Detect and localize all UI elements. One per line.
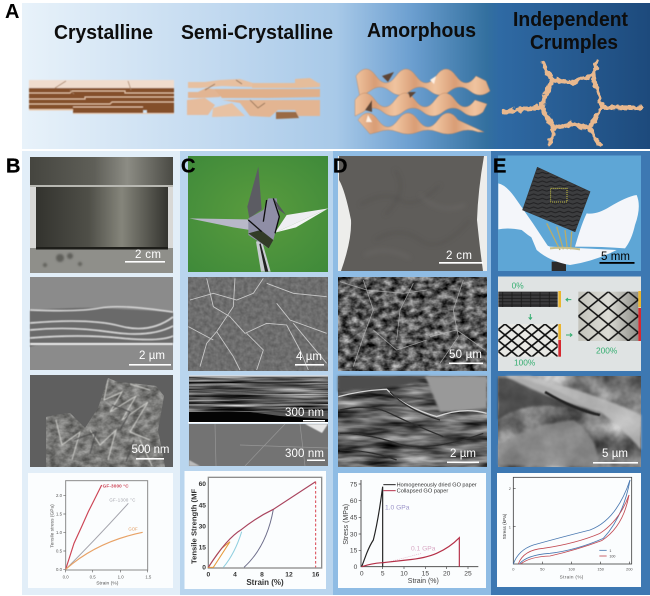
heading: Independent Crumples: Independent bbox=[513, 9, 628, 31]
chart: stress vs strain, GO paper: 75 bbox=[350, 481, 358, 488]
lattice at 0% strain: 0% bbox=[512, 281, 524, 291]
panel label A: A bbox=[5, 1, 19, 23]
chart: stress vs strain, GO paper: Strain (%) bbox=[408, 578, 439, 585]
panel backgrounds bbox=[22, 151, 650, 595]
photo: lattice on flower bbox=[498, 156, 641, 272]
scale bar: 5 mm: 5 mm bbox=[601, 251, 630, 263]
chart: tensile stress vs strain, GF films: GF-3000 °C bbox=[103, 483, 129, 488]
scale bar: 2 cm bbox=[125, 249, 165, 263]
scale bar: 300 nm lower: 300 nm bbox=[285, 448, 324, 460]
panel A: structure types bbox=[5, 1, 650, 149]
scale bar: 2 µm bbox=[447, 448, 479, 463]
scale bar: 2 cm: 2 cm bbox=[446, 250, 472, 262]
scale bar: 4 µm: 4 µm bbox=[296, 351, 322, 363]
scale bar: 300 nm: 300 nm bbox=[285, 407, 324, 419]
chart: tensile strength vs strain: 4 bbox=[233, 571, 237, 578]
chart: stress vs strain, GO paper: 25 bbox=[464, 570, 472, 577]
SEM: lattice wall bbox=[498, 376, 641, 467]
chart: tensile strength vs strain: 0 bbox=[202, 564, 206, 571]
chart: tensile stress vs strain, GF films: 1.0 bbox=[118, 574, 124, 579]
panel label B: B bbox=[6, 156, 20, 178]
illustration: crystalline stacked layers bbox=[29, 80, 174, 114]
chart: tensile strength vs strain bbox=[184, 471, 326, 589]
chart: stress vs strain, GO paper: 30 bbox=[350, 531, 358, 538]
scale bar: 500 nm: 500 nm bbox=[132, 444, 170, 456]
chart: tensile stress vs strain, GF films: 1.5 bbox=[56, 512, 63, 517]
photo: collapsed GO paper bbox=[338, 156, 487, 271]
arrows between states bbox=[529, 298, 572, 337]
chart: stress vs strain, cyclic loading: Stress (kPa) bbox=[502, 513, 507, 539]
heading: Amorphous: Amorphous bbox=[367, 20, 476, 42]
chart: stress vs strain, GO paper: 45 bbox=[350, 515, 358, 522]
photo: graphite cylinder bbox=[30, 157, 173, 273]
SEM: film cross section, smooth bbox=[189, 424, 328, 466]
illustration: amorphous wavy layers bbox=[355, 69, 490, 134]
chart: tensile stress vs strain, GF films: 0.5 bbox=[56, 549, 63, 554]
lattice at 100% strain: 100% bbox=[514, 357, 536, 367]
chart: stress vs strain, GO paper: 0.1 GPa bbox=[411, 546, 436, 553]
chart: tensile stress vs strain, GF films: 0.0 bbox=[56, 567, 63, 572]
chart: stress vs strain, GO paper bbox=[338, 473, 486, 588]
chart: stress vs strain, cyclic loading: Strain (%) bbox=[560, 575, 584, 580]
heading: Semi-Crystalline: Semi-Crystalline bbox=[181, 22, 333, 44]
chart: tensile stress vs strain, GF films: GF-1300 °C bbox=[109, 497, 135, 502]
chart: stress vs strain, cyclic loading: 100 bbox=[568, 566, 576, 571]
chart: stress vs strain, GO paper: 15 bbox=[350, 548, 358, 555]
chart: stress vs strain, GO paper: 60 bbox=[350, 498, 358, 505]
panel label E: E bbox=[493, 156, 506, 178]
chart: stress vs strain, GO paper: 0 bbox=[354, 564, 358, 571]
scale bar: 2 µm: 2 µm bbox=[450, 448, 476, 460]
illustration: independent crumples hexagon bbox=[504, 63, 641, 145]
chart: tensile stress vs strain, GF films: GOF bbox=[128, 527, 138, 532]
chart: stress vs strain, cyclic loading: 50 bbox=[540, 566, 545, 571]
chart: tensile strength vs strain: 12 bbox=[285, 571, 293, 578]
chart: stress vs strain, GO paper: 0 bbox=[360, 570, 364, 577]
chart: tensile strength vs strain: 30 bbox=[199, 523, 206, 530]
illustration: semi-crystalline broken layers bbox=[187, 78, 320, 119]
panel label D: D bbox=[333, 156, 347, 178]
scale bar: 2 cm bbox=[439, 250, 483, 264]
chart: stress vs strain, GO paper: 1.0 GPa bbox=[385, 504, 410, 511]
chart: stress vs strain, GO paper: 5 bbox=[381, 570, 385, 577]
chart: tensile strength vs strain: 60 bbox=[199, 481, 206, 488]
chart: tensile strength vs strain: 45 bbox=[199, 502, 206, 509]
scale bar: 2 µm bbox=[129, 350, 171, 366]
chart: tensile stress vs strain, GF films: Tensile stress (GPa) bbox=[49, 504, 55, 548]
chart: tensile stress vs strain, GF films: 1.5 bbox=[145, 574, 152, 579]
chart: stress vs strain, GO paper: Collapsed GO paper bbox=[397, 489, 449, 495]
chart: tensile strength vs strain: Tensile Strength (MF bbox=[190, 489, 199, 564]
chart: stress vs strain, GO paper: 20 bbox=[443, 570, 451, 577]
chart: tensile strength vs strain: Strain (%) bbox=[246, 578, 284, 587]
chart: tensile stress vs strain, GF films bbox=[28, 473, 173, 588]
chart: stress vs strain, cyclic loading: 200 bbox=[626, 566, 633, 571]
chart: tensile stress vs strain, GF films: 0.0 bbox=[63, 574, 69, 579]
SEM: crumpled surface bbox=[338, 277, 487, 371]
chart: stress vs strain, cyclic loading: 150 bbox=[597, 566, 605, 571]
chart: stress vs strain, GO paper: Homogeneously dried GO paper bbox=[397, 482, 477, 488]
chart: stress vs strain, GO paper: Stress (MPa) bbox=[343, 504, 350, 545]
chart: tensile stress vs strain, GF films: 1.0 bbox=[56, 530, 63, 535]
chart: tensile strength vs strain: 0 bbox=[206, 571, 210, 578]
chart: stress vs strain, GO paper: 15 bbox=[422, 570, 429, 577]
chart: tensile strength vs strain: 8 bbox=[260, 571, 264, 578]
lattice at 200% strain bbox=[578, 291, 641, 355]
chart: tensile stress vs strain, GF films: Strain (%) bbox=[96, 581, 119, 587]
scale bar: 2 µm: 2 µm bbox=[139, 350, 165, 362]
scale bar: 5 µm: 5 µm bbox=[602, 448, 628, 460]
diagram: lattice stretching 0 to 200 percent bbox=[498, 276, 641, 371]
SEM: crumpled cross section bbox=[338, 376, 487, 467]
heading: Independent Crumples: Crumples bbox=[530, 32, 618, 54]
SEM: film cross section, layered bbox=[188, 376, 328, 424]
chart: stress vs strain, cyclic loading bbox=[497, 473, 641, 587]
photo: origami crane bbox=[188, 156, 328, 272]
panel A gradient background bbox=[22, 3, 650, 149]
panel label C: C bbox=[181, 156, 195, 178]
chart: tensile strength vs strain: 16 bbox=[312, 571, 320, 578]
SEM: graphene flake bbox=[30, 375, 173, 467]
chart: tensile stress vs strain, GF films: 0.5 bbox=[90, 574, 96, 579]
lattice at 200% strain: 200% bbox=[596, 345, 618, 355]
chart: stress vs strain, cyclic loading: 1 bbox=[609, 549, 611, 553]
lattice at 100% strain bbox=[498, 324, 561, 367]
SEM: wrinkled graphene film bbox=[188, 277, 328, 371]
chart: tensile strength vs strain: 15 bbox=[199, 544, 206, 551]
lattice at 0% strain bbox=[498, 281, 561, 307]
scale bar: 5 µm bbox=[593, 448, 638, 464]
heading: Independent Crumples bbox=[513, 9, 628, 54]
chart: stress vs strain, cyclic loading: 2 bbox=[509, 486, 512, 491]
chart: stress vs strain, cyclic loading: 100 bbox=[609, 555, 615, 559]
scale bar: 2 cm: 2 cm bbox=[135, 249, 161, 261]
chart: stress vs strain, cyclic loading: 0 bbox=[512, 566, 515, 571]
heading: Crystalline: Crystalline bbox=[54, 22, 153, 44]
scale bar: 50 µm: 50 µm bbox=[449, 349, 482, 361]
chart: tensile stress vs strain, GF films: 2.0 bbox=[56, 493, 63, 498]
chart: stress vs strain, cyclic loading: 1 bbox=[509, 524, 512, 529]
SEM: graphite film cross section bbox=[30, 277, 173, 370]
chart: stress vs strain, GO paper: 10 bbox=[400, 570, 408, 577]
